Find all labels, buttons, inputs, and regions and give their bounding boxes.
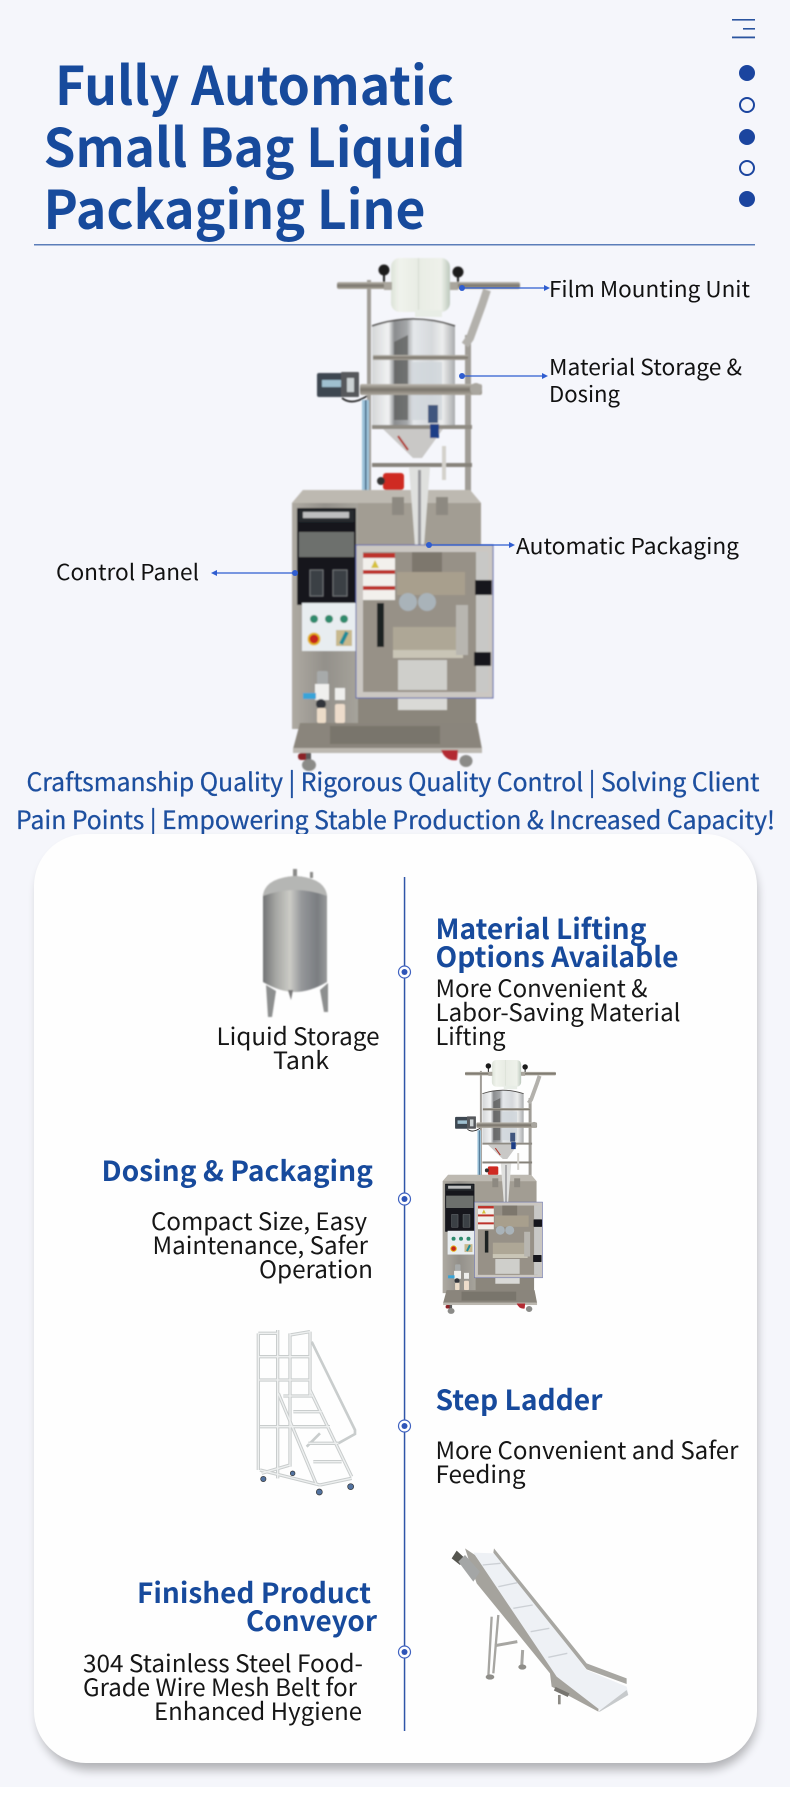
cross rods bbox=[360, 355, 482, 467]
feature: finished product conveyor: Conveyor bbox=[246, 1600, 378, 1640]
pump bbox=[377, 446, 446, 490]
feature: dosing and packaging: Compact Size, Easy bbox=[151, 1202, 367, 1237]
feature: material lifting: Labor-Saving Material bbox=[436, 993, 680, 1028]
feature: finished product conveyor bbox=[83, 1572, 378, 1727]
feature: material lifting: More Convenient & bbox=[436, 969, 648, 1004]
film roll bbox=[384, 258, 458, 317]
icon: liquid storage tank bbox=[263, 869, 328, 1017]
callout: automatic packaging bbox=[426, 529, 740, 561]
bag bbox=[398, 660, 447, 710]
timeline bbox=[398, 877, 410, 1731]
feature: material lifting: Lifting bbox=[436, 1017, 506, 1052]
menu icon bbox=[732, 19, 755, 38]
callout: control panel bbox=[56, 555, 298, 587]
wheels bbox=[298, 750, 472, 771]
chute arm bbox=[465, 290, 487, 345]
feature: finished product conveyor: Grade Wire Mesh Belt for bbox=[83, 1668, 358, 1703]
sealing plates bbox=[377, 552, 468, 658]
button panel bbox=[302, 603, 356, 651]
callout: film mounting unit: Film Mounting Unit bbox=[549, 272, 750, 304]
title: Small Bag Liquid bbox=[44, 107, 466, 183]
label: step ladder: Feeding bbox=[436, 1455, 526, 1490]
title: Packaging Line bbox=[44, 169, 426, 245]
motor bbox=[317, 372, 367, 402]
rear uprights bbox=[367, 280, 471, 545]
cone bbox=[383, 429, 443, 458]
callout: control panel: Control Panel bbox=[56, 555, 199, 587]
icon: conveyor bbox=[452, 1548, 628, 1712]
feature: material lifting: Material Lifting bbox=[436, 908, 647, 948]
hinges bbox=[474, 580, 492, 666]
feature: finished product conveyor: 304 Stainless Steel Food- bbox=[83, 1644, 363, 1679]
icon: step ladder bbox=[258, 1330, 355, 1495]
rear box bbox=[292, 490, 481, 548]
title bbox=[44, 45, 466, 245]
body base bbox=[358, 696, 476, 727]
air filter bbox=[303, 671, 345, 723]
label: liquid storage tank bbox=[216, 1017, 380, 1076]
label: liquid storage tank: Liquid Storage bbox=[216, 1017, 380, 1052]
callout: material storage and dosing bbox=[459, 350, 742, 409]
machine illustration bbox=[292, 258, 520, 771]
tagline bbox=[16, 763, 775, 837]
forming tube bbox=[409, 467, 430, 546]
title: Fully Automatic bbox=[55, 45, 454, 121]
feature: dosing and packaging: Operation bbox=[259, 1250, 373, 1285]
control box bbox=[292, 503, 358, 729]
knobs bbox=[378, 264, 464, 282]
label: step ladder: More Convenient and Safer bbox=[436, 1431, 739, 1466]
label: liquid storage tank: Tank bbox=[273, 1041, 329, 1076]
feature: finished product conveyor: Finished Product bbox=[137, 1572, 371, 1612]
pagination dots bbox=[739, 65, 755, 207]
warning labels bbox=[363, 553, 395, 600]
panel: feature card bbox=[34, 834, 757, 1763]
film mounting bar bbox=[337, 282, 520, 289]
feature: dosing and packaging: Dosing & Packaging bbox=[102, 1150, 373, 1190]
label: step ladder bbox=[436, 1379, 739, 1490]
callout: material storage and dosing: Dosing bbox=[549, 377, 621, 409]
chain strip bbox=[362, 400, 369, 518]
callout: material storage and dosing: Material Storage & bbox=[549, 350, 742, 382]
label: step ladder: Step Ladder bbox=[436, 1379, 603, 1419]
feature: material lifting: Options Available bbox=[436, 936, 678, 976]
base plate bbox=[293, 723, 482, 753]
feature: finished product conveyor: Enhanced Hygiene bbox=[154, 1692, 362, 1727]
callout: film mounting unit bbox=[459, 272, 750, 304]
hopper bbox=[372, 319, 455, 425]
feature: dosing and packaging bbox=[102, 1150, 373, 1285]
feature: material lifting bbox=[436, 908, 680, 1052]
callout: automatic packaging: Automatic Packaging bbox=[516, 529, 740, 561]
door bbox=[356, 545, 493, 698]
feature: dosing and packaging: Maintenance, Safer bbox=[152, 1226, 369, 1261]
tagline: Craftsmanship Quality | Rigorous Quality Control | Solving Client bbox=[26, 763, 760, 799]
control display bbox=[297, 508, 356, 605]
small machine image bbox=[443, 1060, 556, 1314]
tagline: Pain Points | Empowering Stable Production & Increased Capacity! bbox=[16, 801, 775, 837]
